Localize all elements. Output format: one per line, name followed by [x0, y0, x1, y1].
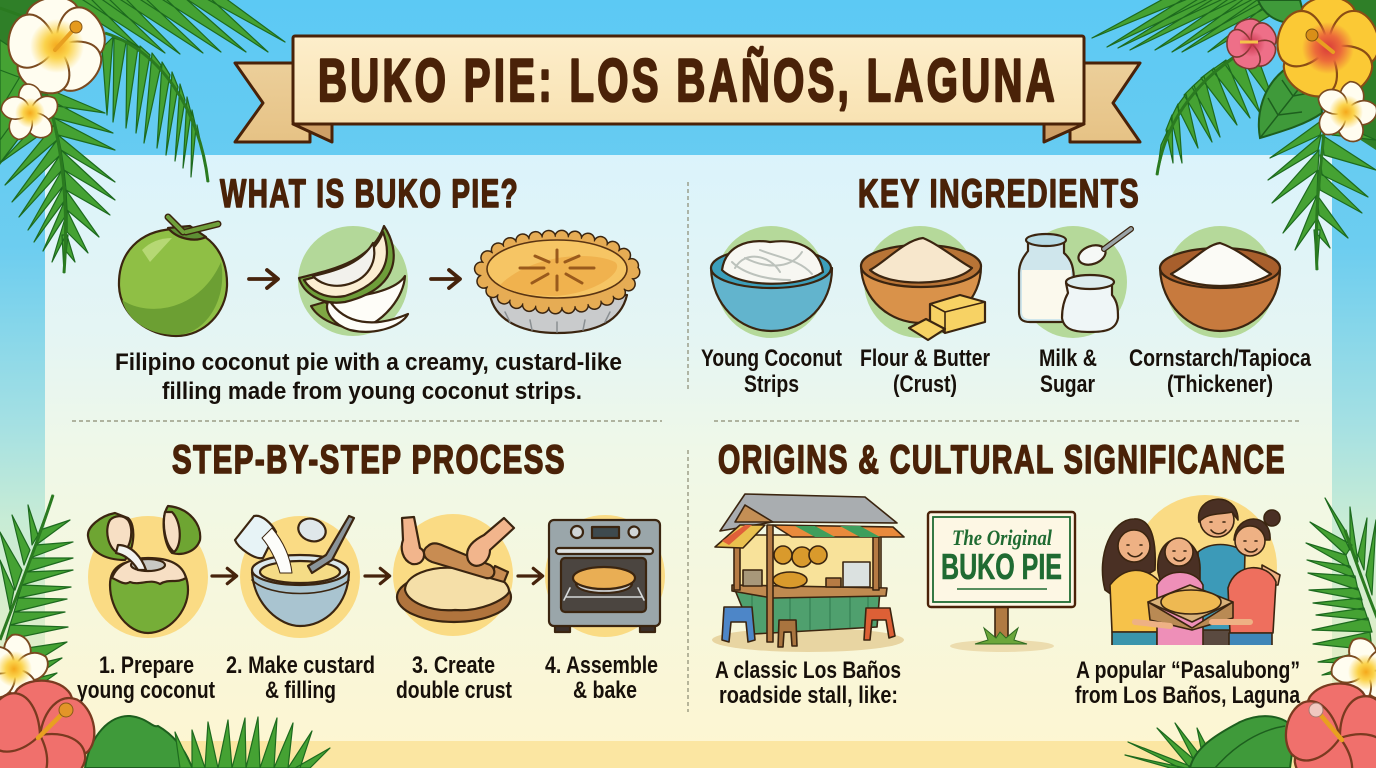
arrow: step 1 to 2 [212, 568, 237, 584]
banner left tail [235, 63, 310, 142]
label: step 4: 4. Assemble [545, 652, 658, 679]
label: step 2: 2. Make custard [226, 652, 375, 679]
ingredient: young coconut strips [701, 226, 842, 398]
foliage: bottom-left palm [0, 495, 73, 688]
flower: plumeria bottom-right [1324, 632, 1376, 714]
background: content panel [45, 155, 1332, 745]
label: step 1 [77, 652, 215, 704]
text: description: Filipino coconut pie with a creamy, custard-like [115, 349, 622, 376]
foliage: top-right palm fronds and leaves [1092, 0, 1376, 270]
label: milk and sugar: Milk & [1039, 345, 1097, 372]
label: step 3: double crust [396, 677, 512, 704]
illustration: the original buko pie sign: BUKO PIE [941, 546, 1062, 587]
banner right tail [1070, 63, 1140, 142]
illustration: roadside stall [712, 494, 904, 709]
flower: red hibiscus bottom-right [1274, 678, 1376, 768]
arrow: step 3 to 4 [518, 568, 543, 584]
label: step 4 [545, 652, 658, 704]
label: young coconut strips: Young Coconut [701, 345, 842, 372]
title banner [235, 36, 1140, 142]
label: step 2 [226, 652, 375, 704]
label: step 2: & filling [265, 677, 336, 704]
icon: green coconut [119, 217, 227, 336]
father [1198, 499, 1280, 646]
label: family caption [1075, 657, 1301, 709]
text: description: filling made from young coconut strips. [162, 378, 582, 405]
label: milk and sugar: Sugar [1040, 371, 1095, 398]
background: sand strip [0, 741, 1376, 768]
step 2: make custard and filling [226, 515, 375, 704]
label: stall caption [715, 657, 901, 709]
illustration: the original buko pie sign [928, 512, 1075, 652]
icon: buko pie [481, 237, 633, 333]
label: young coconut strips [701, 345, 842, 398]
flower: plumeria top-right [1304, 72, 1376, 153]
label: step 3: 3. Create [412, 652, 495, 679]
label: family caption: A popular “Pasalubong” [1076, 657, 1300, 684]
label: milk and sugar [1039, 345, 1097, 398]
step 3: create double crust [393, 514, 514, 704]
girl [1157, 538, 1203, 646]
label: stall caption: A classic Los Baños [715, 657, 901, 684]
foliage: bottom-left monstera leaf and palm [85, 716, 330, 768]
icon: coconut pieces [298, 226, 408, 336]
flower: plumeria bottom-left [0, 629, 56, 711]
flower: yellow hibiscus top-right [1271, 0, 1376, 106]
banner left fold [293, 124, 332, 142]
label: step 4: & bake [573, 677, 637, 704]
illustration: the original buko pie sign: The Original [952, 525, 1053, 550]
dashed dividers [72, 182, 1302, 712]
woman with bun [1228, 510, 1280, 646]
flower: white hibiscus top-left [0, 0, 119, 108]
label: flour and butter: (Crust) [893, 371, 957, 398]
flower: red hibiscus bottom-left [0, 675, 105, 768]
ingredient: cornstarch or tapioca [1129, 226, 1312, 398]
label: family caption: from Los Baños, Laguna [1075, 682, 1301, 709]
flower: plumeria top-left [0, 84, 61, 143]
label: cornstarch or tapioca [1129, 345, 1312, 398]
illustration: family with pie box [1075, 495, 1301, 709]
foliage: bottom-right palm [1306, 498, 1376, 675]
heading: key ingredients: KEY INGREDIENTS [858, 172, 1140, 216]
arrow: strips to pie [431, 270, 460, 288]
label: step 1: 1. Prepare [99, 652, 194, 679]
step 1: prepare young coconut [77, 506, 215, 704]
banner right fold [1044, 124, 1084, 142]
mother with long hair [1102, 519, 1160, 646]
label: cornstarch or tapioca: (Thickener) [1167, 371, 1273, 398]
flower: pink hibiscus top-right [1218, 12, 1286, 79]
foliage: top-left palm fronds [0, 0, 285, 273]
step 4: assemble and bake [545, 515, 665, 704]
label: cornstarch or tapioca: Cornstarch/Tapioca [1129, 345, 1312, 372]
label: step 3 [396, 652, 512, 704]
foliage: bottom-right palm and leaf [1125, 716, 1295, 768]
banner main plate [293, 36, 1084, 124]
heading: step-by-step process: STEP-BY-STEP PROCESS [172, 438, 566, 482]
arrow: coconut to strips [249, 270, 278, 288]
ingredient: milk and sugar [1019, 226, 1131, 398]
heading: what is buko pie: WHAT IS BUKO PIE? [220, 172, 519, 216]
text: description [115, 349, 622, 405]
label: young coconut strips: Strips [744, 371, 799, 398]
label: flour and butter [860, 345, 990, 398]
pie box [1135, 585, 1250, 630]
label: step 1: young coconut [77, 677, 215, 704]
ingredient: flour and butter [860, 226, 990, 398]
arrow: step 2 to 3 [365, 568, 390, 584]
label: stall caption: roadside stall, like: [719, 682, 898, 709]
label: flour and butter: Flour & Butter [860, 345, 990, 372]
